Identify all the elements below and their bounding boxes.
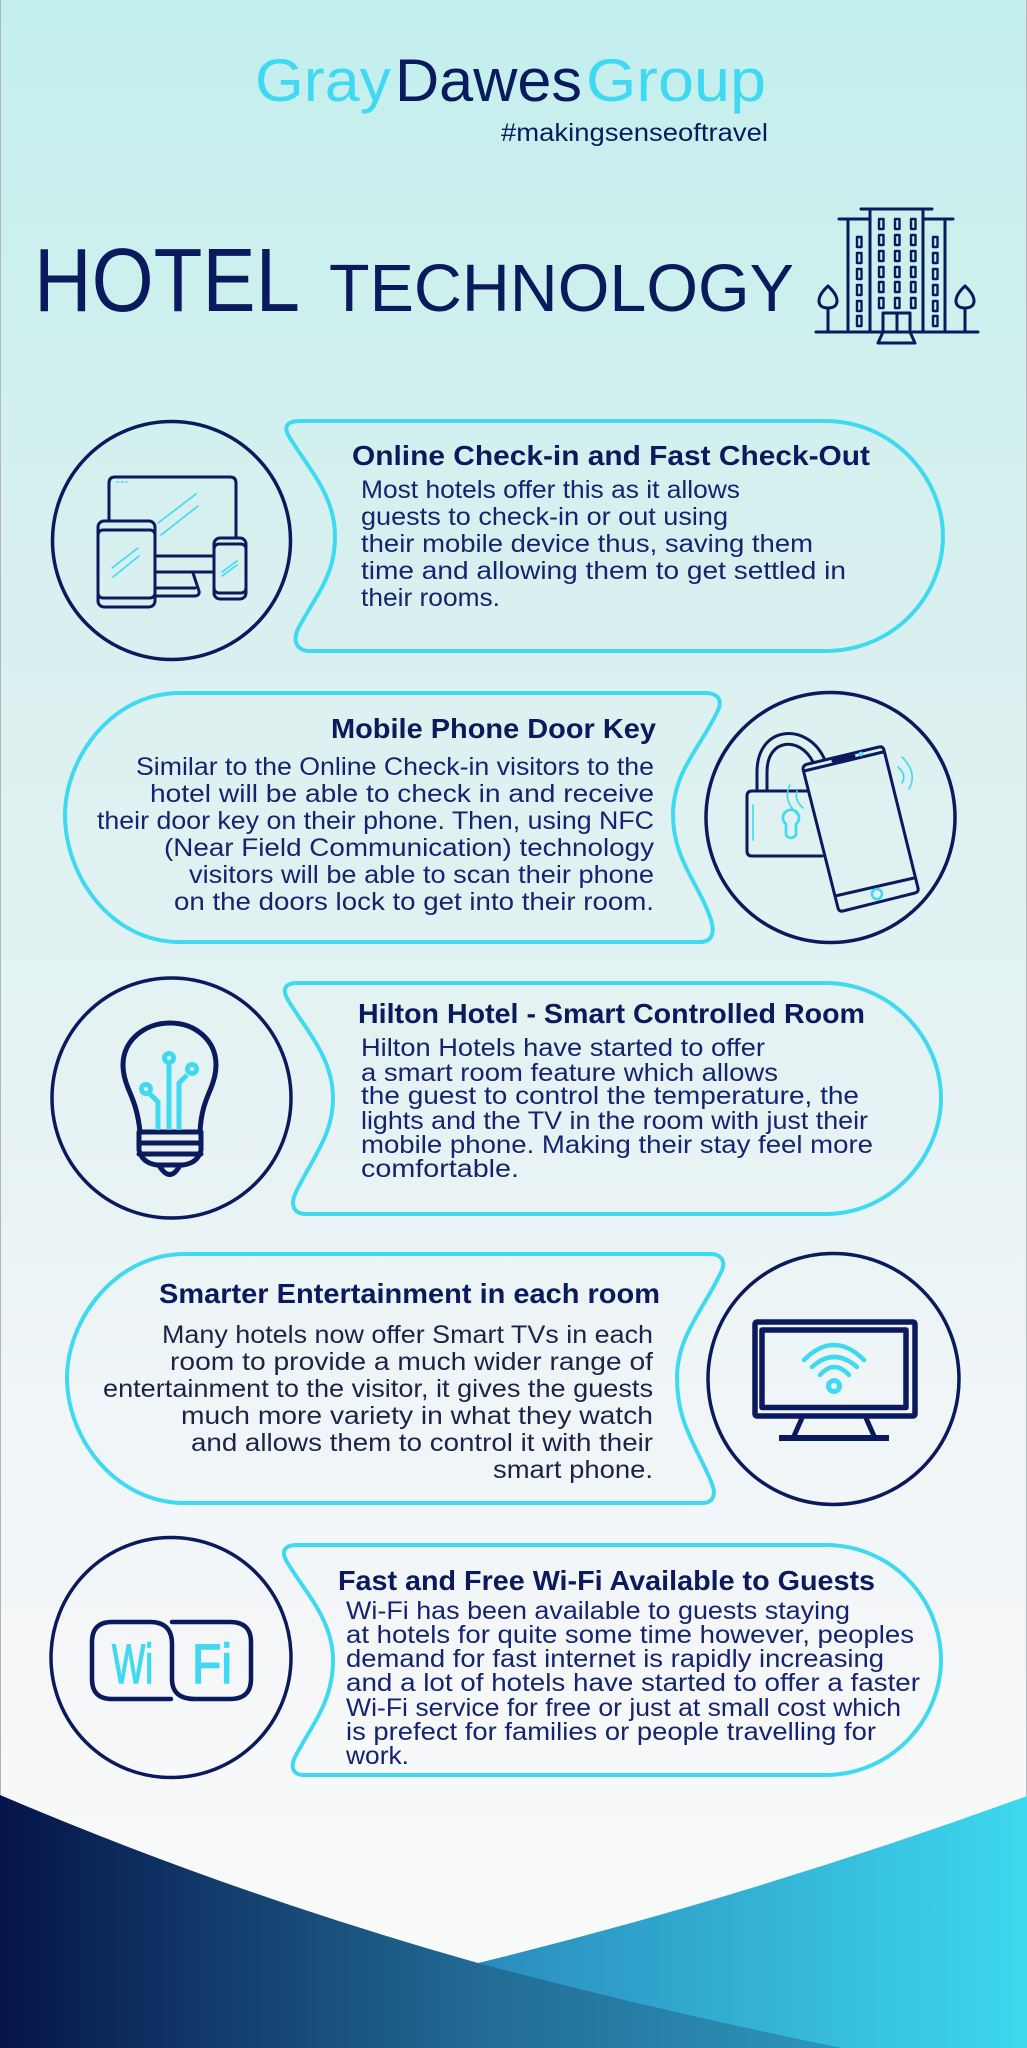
body text: the guest to control the temperature, the	[361, 1082, 859, 1110]
heading: Fast and Free Wi-Fi Available to Guests	[338, 1565, 875, 1596]
logo: Group	[586, 47, 766, 114]
heading: Smarter Entertainment in each room	[159, 1278, 660, 1309]
body text: hotel will be able to check in and receive	[150, 780, 654, 808]
body text: comfortable.	[361, 1155, 519, 1183]
panel: smart room	[52, 978, 941, 1218]
logo: Gray	[255, 47, 391, 114]
logo	[255, 47, 766, 114]
speech bubble	[65, 693, 720, 942]
body text: their door key on their phone. Then, using NFC	[97, 807, 654, 835]
body text: on the doors lock to get into their room.	[174, 888, 654, 916]
body text: their mobile device thus, saving them	[361, 530, 813, 558]
icon circle: smart TV	[708, 1254, 959, 1504]
icon circle: wi-fi: Fi	[192, 1632, 232, 1695]
body text: Similar to the Online Check-in visitors to the	[136, 753, 654, 781]
body text: visitors will be able to scan their phone	[189, 861, 654, 889]
body text: much more variety in what they watch	[181, 1402, 653, 1430]
body text: Hilton Hotels have started to offer	[361, 1034, 765, 1062]
body text	[361, 476, 846, 612]
heading: Online Check-in and Fast Check-Out	[352, 440, 870, 471]
icon circle: lock and phone	[706, 692, 955, 942]
speech bubble	[284, 1545, 941, 1775]
panel: smart entertainment	[67, 1254, 959, 1504]
body text: time and allowing them to get settled in	[361, 557, 846, 585]
speech bubble	[285, 983, 941, 1214]
body text: room to provide a much wider range of	[170, 1348, 653, 1376]
body text: lights and the TV in the room with just their	[361, 1107, 868, 1135]
body text: work.	[345, 1742, 409, 1770]
footer chevron	[0, 1795, 1027, 2048]
body text: their rooms.	[361, 584, 500, 612]
hashtag: #makingsenseoftravel	[501, 119, 768, 147]
body text: Wi-Fi service for free or just at small cost which	[346, 1694, 901, 1722]
icon: hotel building	[816, 209, 978, 343]
panel: wi-fi	[51, 1538, 941, 1778]
body text: Wi-Fi has been available to guests staying	[346, 1597, 850, 1625]
body text: Many hotels now offer Smart TVs in each	[162, 1321, 653, 1349]
body text: at hotels for quite some time however, peoples	[346, 1621, 914, 1649]
icon circle: light bulb	[52, 978, 291, 1218]
body text	[97, 753, 655, 916]
body text: demand for fast internet is rapidly increasing	[346, 1645, 884, 1673]
icon circle: wi-fi: Wi	[112, 1632, 153, 1695]
body text	[345, 1597, 920, 1770]
body text: guests to check-in or out using	[361, 503, 728, 531]
icon circle: wi-fi	[51, 1538, 291, 1778]
panel: mobile door key	[65, 692, 955, 942]
body text	[103, 1321, 653, 1484]
body text: a smart room feature which allows	[361, 1059, 778, 1087]
body text: is prefect for families or people travelling for	[346, 1718, 876, 1746]
body text: and allows them to control it with their	[191, 1429, 653, 1457]
speech bubble	[67, 1254, 723, 1503]
heading: Hilton Hotel - Smart Controlled Room	[358, 998, 865, 1029]
body text: and a lot of hotels have started to offer a faster	[346, 1669, 920, 1697]
icon circle: devices	[52, 422, 290, 660]
title: HOTEL	[34, 231, 300, 331]
panel: online check-in	[52, 421, 943, 660]
body text	[361, 1034, 873, 1183]
speech bubble	[286, 421, 943, 651]
heading: Mobile Phone Door Key	[331, 713, 656, 744]
body text: (Near Field Communication) technology	[164, 834, 655, 862]
body text: Most hotels offer this as it allows	[361, 476, 740, 504]
body text: entertainment to the visitor, it gives the guests	[103, 1375, 653, 1403]
body text: smart phone.	[493, 1456, 653, 1484]
title: TECHNOLOGY	[329, 251, 794, 326]
logo: Dawes	[395, 47, 582, 114]
title	[34, 231, 794, 331]
body text: mobile phone. Making their stay feel more	[361, 1131, 873, 1159]
